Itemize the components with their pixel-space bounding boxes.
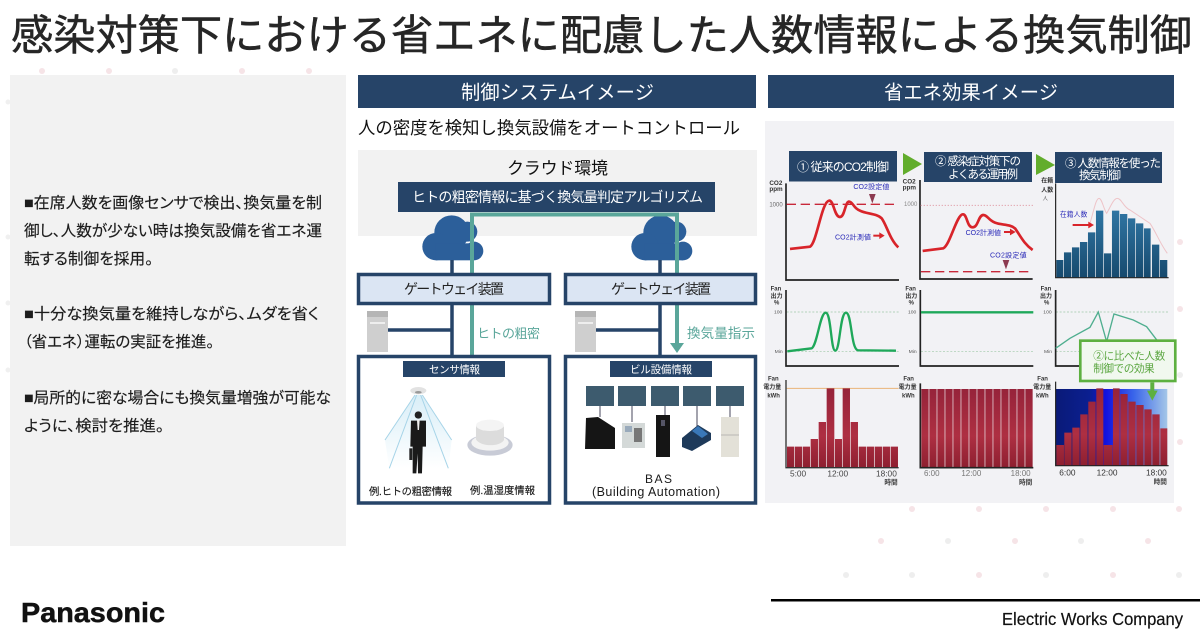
chart: fan energy typical: Fan [903,377,914,383]
chart: fan output typical: 出力 [905,292,917,300]
header: people count control [1055,152,1162,183]
chart: fan output people count: 出力 [1040,292,1052,300]
subtitle: 人の密度を検知し換気設備をオートコントロール [358,118,740,138]
chart: CO2 typical operation: CO2計測値 [966,228,1001,237]
arrow: step 2 to 3 [1036,154,1055,175]
chart: people count bars: 人 [1043,196,1049,202]
chart: fan energy people count: 18:00 [1146,467,1167,477]
chart: CO2 typical operation: CO2設定値 [990,250,1027,259]
text block: bullet 3: ように、検討を推進。 [24,418,164,435]
chart: fan output people count: % [1044,301,1050,307]
panel: summary text [10,75,346,546]
gateway box left [358,274,550,304]
text block: bullet 2: （省エネ）運転の実証を推進。 [24,334,214,351]
chart: fan output conventional: Fan [771,287,782,293]
chart: fan output typical: 100 [908,310,917,316]
chart: fan energy conventional: kWh [767,394,780,400]
sensor info label: センサ情報 [429,363,480,376]
header: people count control: 換気制御 [1079,168,1121,182]
chart: CO2 conventional [769,180,899,280]
text block: bullet 1: 御し、人数が少ない時は換気設備を省エネ運 [24,223,322,240]
chart: fan energy typical: kWh [902,394,915,400]
icon: temperature humidity sensor [467,420,513,456]
chart: fan output typical: % [909,301,915,307]
text block: bullet 2: ■十分な換気量を維持しながら、ムダを省く [24,306,319,323]
chart: fan output people count: 100 [1043,310,1052,316]
building equipment box [566,356,756,503]
chart: people count bars: 在籍 [1041,177,1053,185]
caption: person density: 例.ヒトの粗密情報 [369,485,452,498]
navy connection lines [388,260,660,356]
header: people count control: ③ 人数情報を使った [1065,156,1161,170]
chart: CO2 conventional: CO2 [769,180,783,187]
chart: fan output people count [1040,287,1168,366]
chart: fan energy people count: 12:00 [1097,467,1118,477]
chart: fan energy typical [899,377,1033,486]
chart: fan energy people count: kWh [1036,394,1049,400]
text block: bullet 1: ■在席人数を画像センサで検出、換気量を制 [24,195,322,212]
text block: bullet 3 [24,390,331,435]
sensor info label [403,361,505,377]
heading: control system: 制御システムイメージ [461,82,654,104]
text block: bullet 3: ■局所的に密な場合にも換気量増強が可能な [24,390,331,407]
algorithm bar: ヒトの粗密情報に基づく換気量判定アルゴリズム [412,189,703,205]
text block: bullet 2 [24,306,319,351]
chart: fan energy people count: 時間 [1154,477,1167,486]
chart: fan output conventional: Min [775,349,783,355]
icon: field devices [585,415,739,457]
chart: fan energy conventional: 18:00 [876,469,897,479]
callout: effect compared to case 2 [1080,341,1175,401]
callout: effect compared to case 2: 制御での効果 [1093,362,1155,375]
gateway box right: ゲートウェイ装置 [611,281,711,297]
gateway box left: ゲートウェイ装置 [404,281,504,297]
chart: fan energy conventional: 12:00 [827,469,849,479]
heading: control system [358,75,756,108]
header: typical operation: よくある運用例 [948,167,1018,181]
heading: energy saving effect [768,75,1174,108]
caption: BAS [592,472,720,499]
teal data line and arrow [472,214,684,356]
icon: server left [367,311,388,352]
chart: fan energy typical: 12:00 [961,469,982,478]
chart: CO2 conventional: ppm [769,186,783,193]
chart: fan energy typical: 時間 [1019,477,1033,486]
chart: CO2 typical operation: 1000 [904,202,918,208]
chart: fan output conventional: 100 [774,310,783,316]
chart: fan output typical: Fan [905,287,916,293]
chart: fan energy conventional: 電力量 [763,383,781,391]
chart: CO2 conventional: CO2設定値 [853,182,889,191]
chart: fan output conventional: 出力 [771,292,783,300]
header: typical operation: ② 感染症対策下の [935,154,1021,168]
chart: CO2 conventional: 1000 [769,203,783,209]
chart: fan output people count: Min [1044,349,1052,355]
chart: CO2 conventional: CO2計測値 [835,232,871,241]
arrow: step 1 to 2 [903,153,922,175]
panel: energy saving charts [763,121,1175,503]
chart: people count bars [1041,177,1169,278]
text block: bullet 1: 転する制御を採用。 [24,251,153,268]
heading: energy saving effect: 省エネ効果イメージ [884,82,1058,104]
chart: people count bars: 在籍人数 [1060,210,1088,219]
icon: cloud left [422,215,483,260]
icon: cloud right [631,215,692,260]
panel: cloud environment: クラウド環境 [507,159,608,178]
chart: fan energy conventional: 時間 [884,477,898,486]
text block: bullet 1 [24,195,322,268]
chart: fan output conventional [771,287,900,366]
chart: fan output typical: Min [909,349,917,355]
caption: BAS: (Building Automation) [592,485,720,499]
icon: server right [575,311,596,352]
logo: Panasonic: Panasonic [21,597,165,628]
chart: fan energy typical: 電力量 [899,383,917,391]
chart: fan energy people count: 6:00 [1059,467,1076,477]
chart: CO2 typical operation: CO2 [903,178,916,185]
chart: fan energy people count [1033,377,1169,486]
icon: ceiling sensor and person [385,387,452,473]
caption: temp humidity: 例.温湿度情報 [470,484,535,497]
header: typical operation [924,152,1032,182]
chart: people count bars: 人数 [1041,186,1053,194]
footer: company name: Electric Works Company [1002,609,1183,629]
chart: fan energy conventional: Fan [768,377,779,383]
header: conventional CO2 control: ① 従来のCO2制御 [797,159,889,174]
chart: fan output people count: Fan [1041,287,1052,293]
label: person density: ヒトの粗密 [477,326,540,341]
caption: BAS: BAS [645,472,672,486]
panel: cloud environment [358,150,757,236]
label: airflow command: 換気量指示 [687,326,755,341]
building equipment label [610,361,712,377]
chart: fan energy conventional [763,377,899,486]
chart: fan output typical [905,287,1033,366]
chart: fan energy conventional: 5:00 [790,469,807,479]
gateway box right [566,274,756,304]
chart: CO2 typical operation [903,178,1033,279]
icon: BAS controllers [586,386,744,426]
chart: fan energy people count: 電力量 [1033,383,1051,391]
title: 感染対策下における省エネに配慮した人数情報による換気制御 [11,12,1192,59]
chart: CO2 typical operation: ppm [903,184,916,191]
callout: effect compared to case 2: ②に比べた人数 [1093,349,1166,362]
footer rule [771,599,1200,602]
algorithm bar [398,182,715,212]
chart: fan energy people count: Fan [1037,377,1048,383]
chart: fan output conventional: % [774,301,780,307]
building equipment label: ビル設備情報 [630,363,692,376]
sensor info box [358,356,550,503]
chart: fan energy typical: 18:00 [1011,469,1031,478]
header: conventional CO2 control [789,151,897,182]
chart: fan energy typical: 6:00 [924,469,940,478]
